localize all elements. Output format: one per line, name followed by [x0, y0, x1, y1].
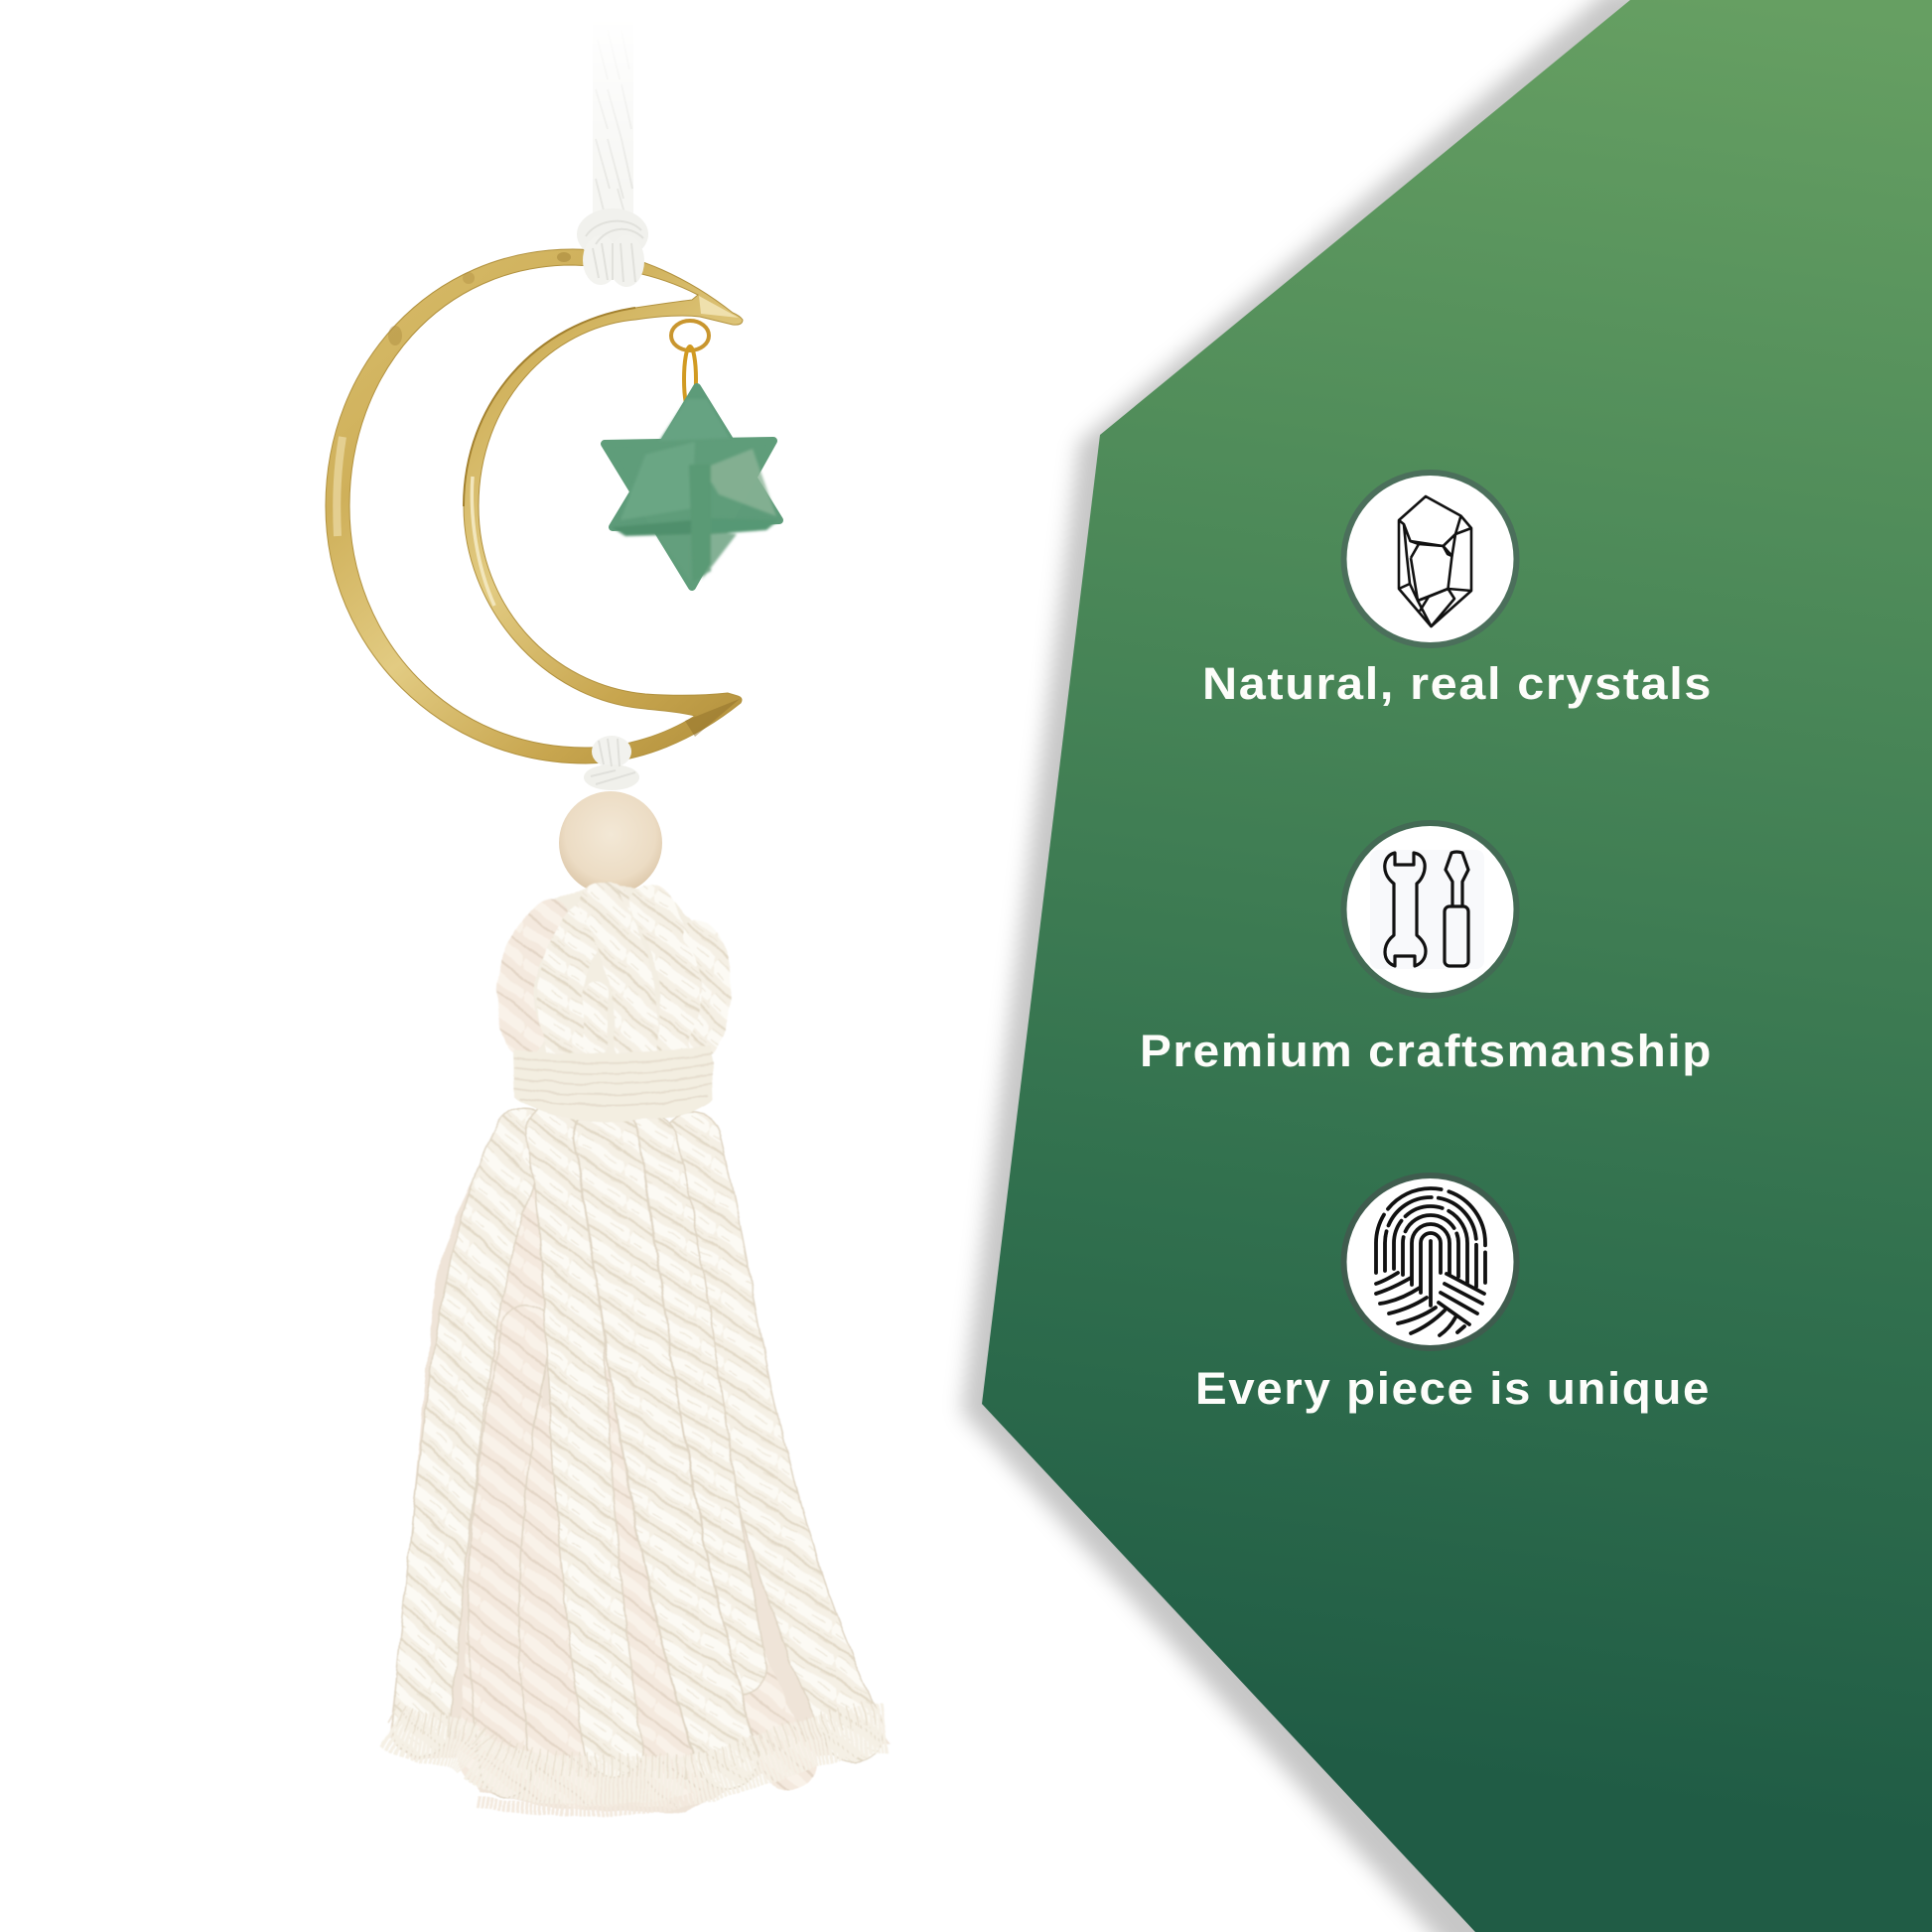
inner right strand	[650, 1142, 740, 1668]
icon: wrench and screwdriver badge	[1344, 823, 1517, 996]
tassel silhouette base	[389, 1117, 891, 1813]
feature: premium craftsmanship	[1140, 823, 1713, 1076]
front centre-left strand	[554, 1132, 614, 1747]
text: natural real crystals: Natural, real crystals	[1202, 658, 1713, 709]
right outer strand	[691, 1142, 854, 1732]
back strands	[443, 1191, 789, 1787]
left outer strand	[421, 1137, 524, 1727]
text: every piece is unique: Every piece is unique	[1195, 1363, 1711, 1414]
frayed rope ends	[393, 1713, 887, 1811]
panel shadow	[962, 0, 1932, 1932]
top knot	[577, 208, 648, 287]
hanging cord	[593, 69, 633, 212]
tassel binding band	[513, 1045, 713, 1122]
product: moon and crystal tassel hanging ornament	[326, 0, 891, 1813]
feature: natural crystals	[1202, 473, 1713, 709]
lower left strand	[493, 1330, 526, 1772]
lower knot	[584, 736, 639, 790]
tassel head	[503, 887, 727, 1054]
icon: crystal badge	[1344, 473, 1517, 645]
icon: fingerprint badge	[1344, 1175, 1517, 1348]
cotton rope tassel	[389, 887, 891, 1813]
star charm jump rings	[671, 321, 709, 412]
gold crescent moon frame	[326, 249, 743, 763]
green aventurine merkaba star	[605, 387, 779, 587]
wooden bead	[559, 791, 662, 895]
front centre strand	[606, 1137, 727, 1757]
panel: green feature panel	[982, 0, 1932, 1932]
text: premium craftsmanship: Premium craftsmanship	[1140, 1026, 1713, 1076]
feature: every piece is unique	[1195, 1175, 1711, 1414]
